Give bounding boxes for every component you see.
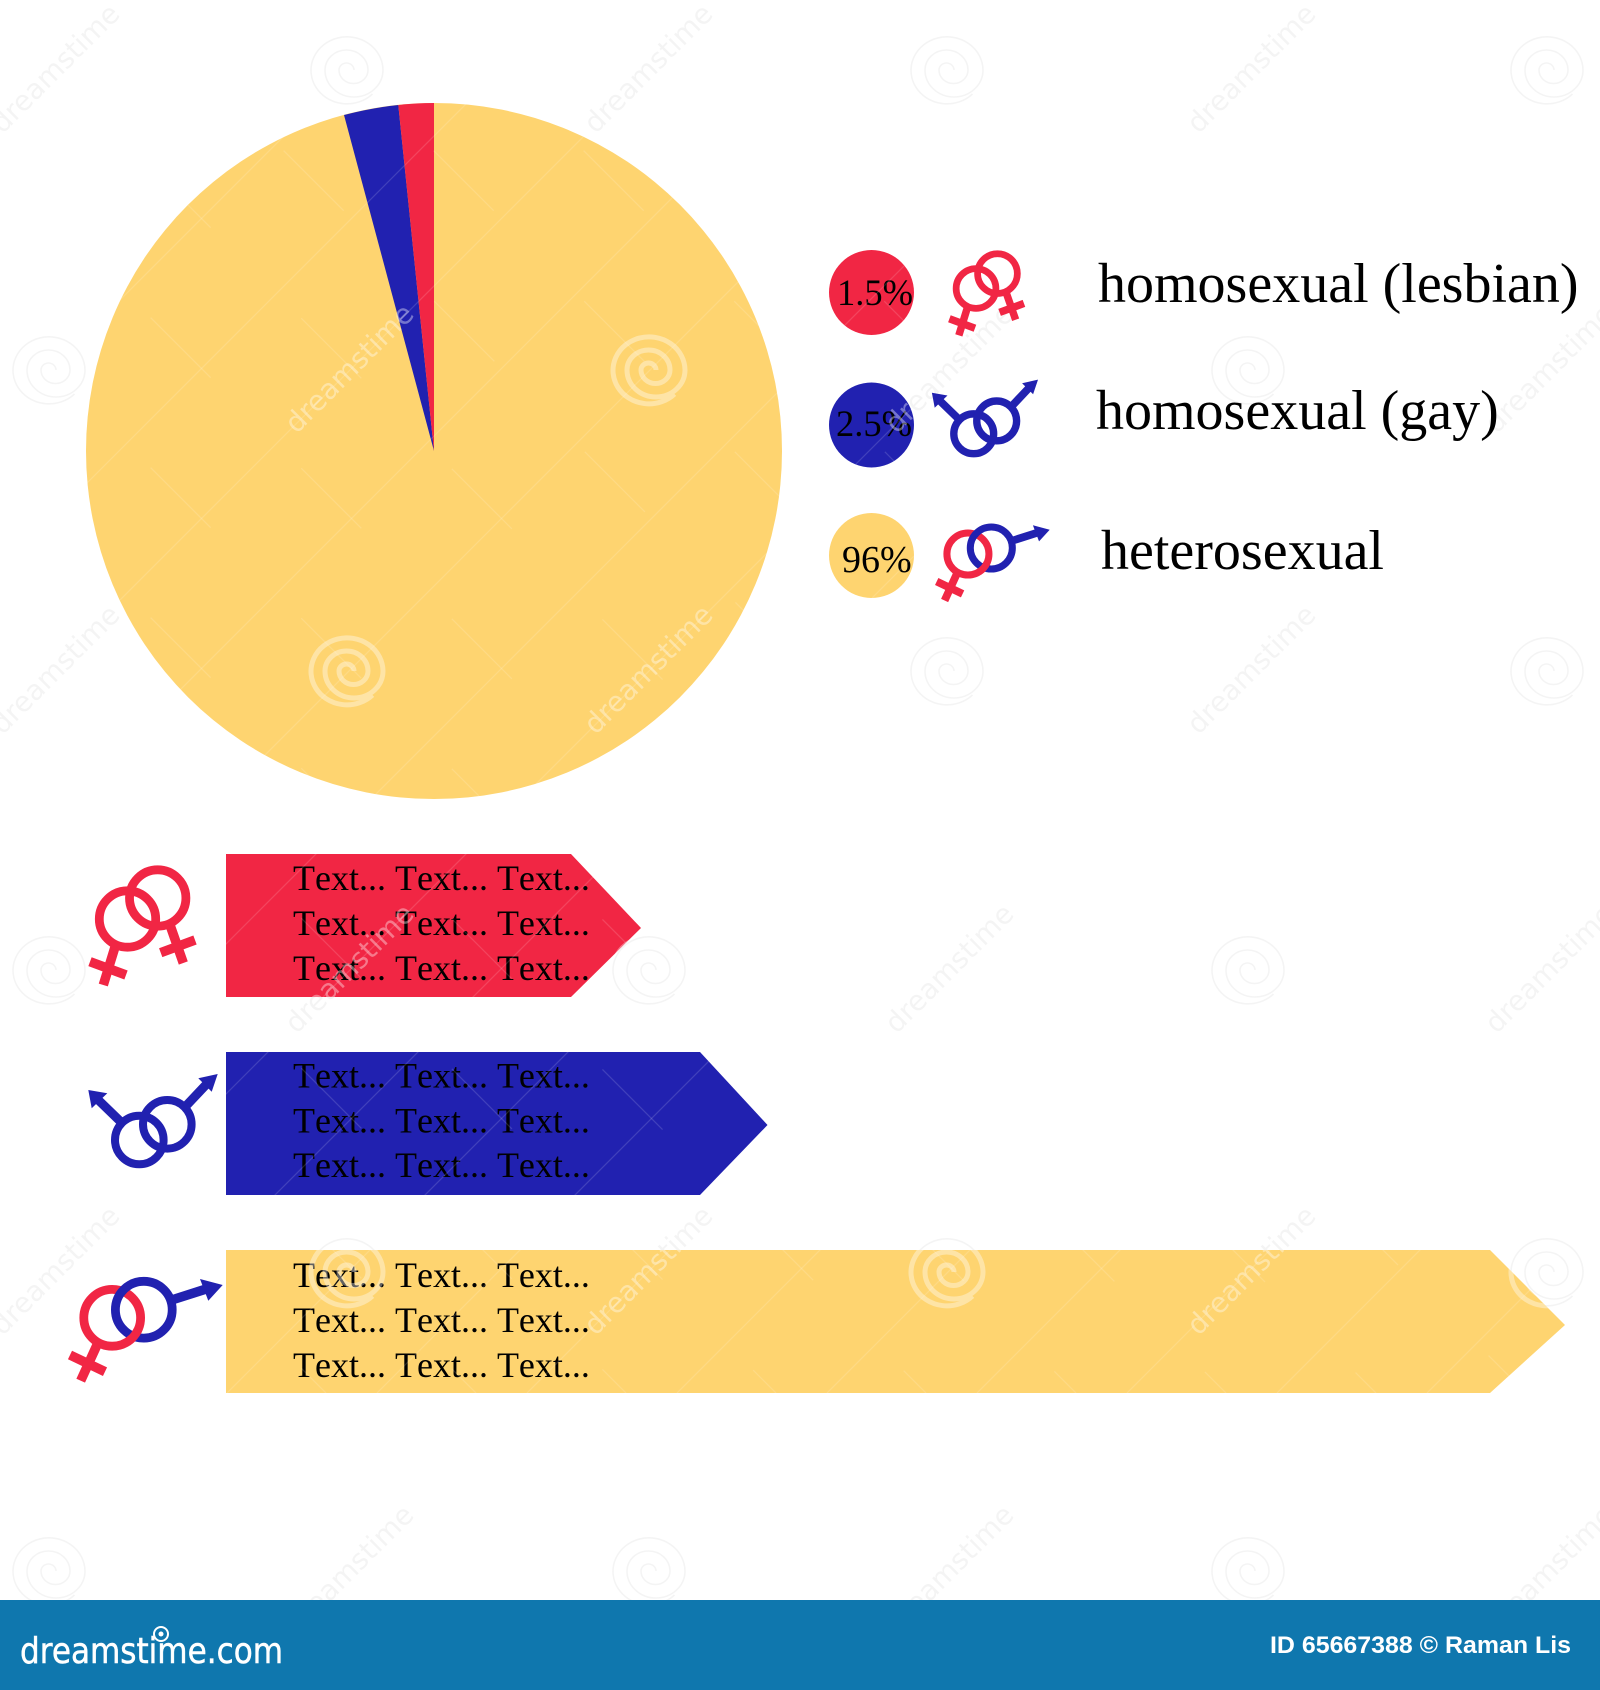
pie chart (86, 103, 782, 799)
legend label lesbian: homosexual (lesbian) (1098, 253, 1579, 315)
placeholder text block: Text... Text... Text... (293, 1255, 590, 1295)
placeholder text block (293, 1255, 590, 1385)
placeholder text block: Text... Text... Text... (293, 1056, 590, 1096)
placeholder text block: Text... Text... Text... (293, 1345, 590, 1385)
icon: female and male symbols (937, 525, 1050, 601)
legend label heterosexual: heterosexual (1101, 520, 1384, 582)
icon: two female symbols (949, 254, 1024, 335)
arrow panel: heterosexual (226, 1250, 1565, 1393)
placeholder text block: Text... Text... Text... (293, 1145, 590, 1185)
pie slice: heterosexual 96% (86, 103, 782, 799)
pie slice: lesbian 1.5% (398, 103, 434, 451)
percentage badge 1.5%: 1.5% (837, 272, 913, 313)
legend: gay (829, 380, 1499, 468)
arrow panel: lesbian (226, 854, 641, 997)
icon: large two male symbols (88, 1074, 218, 1164)
icon: two male symbols (932, 380, 1038, 454)
legend label gay: homosexual (gay) (1096, 380, 1499, 442)
icon: large two female symbols (90, 870, 195, 985)
percentage badge 2.5% (829, 382, 914, 468)
percentage badge 96% (829, 513, 914, 598)
percentage badge 2.5%: 2.5% (836, 403, 912, 444)
placeholder text block: Text... Text... Text... (293, 858, 590, 898)
icon: large female and male symbols (70, 1279, 223, 1381)
legend: heterosexual (829, 513, 1384, 601)
placeholder text block: Text... Text... Text... (293, 903, 590, 943)
percentage badge 96%: 96% (842, 539, 912, 581)
placeholder text block (293, 858, 590, 988)
pie slice: gay 2.5% (344, 105, 434, 451)
placeholder text block: Text... Text... Text... (293, 948, 590, 988)
percentage badge 1.5% (829, 250, 914, 335)
placeholder text block: Text... Text... Text... (293, 1100, 590, 1140)
arrow panel: gay (226, 1052, 768, 1195)
footer logo: dreamstime.com (20, 1631, 283, 1672)
placeholder text block: Text... Text... Text... (293, 1300, 590, 1340)
legend: lesbian (829, 250, 1579, 335)
footer bar (0, 1600, 1600, 1690)
placeholder text block (293, 1056, 590, 1185)
footer credit: ID 65667388 © Raman Lis (1270, 1632, 1571, 1659)
